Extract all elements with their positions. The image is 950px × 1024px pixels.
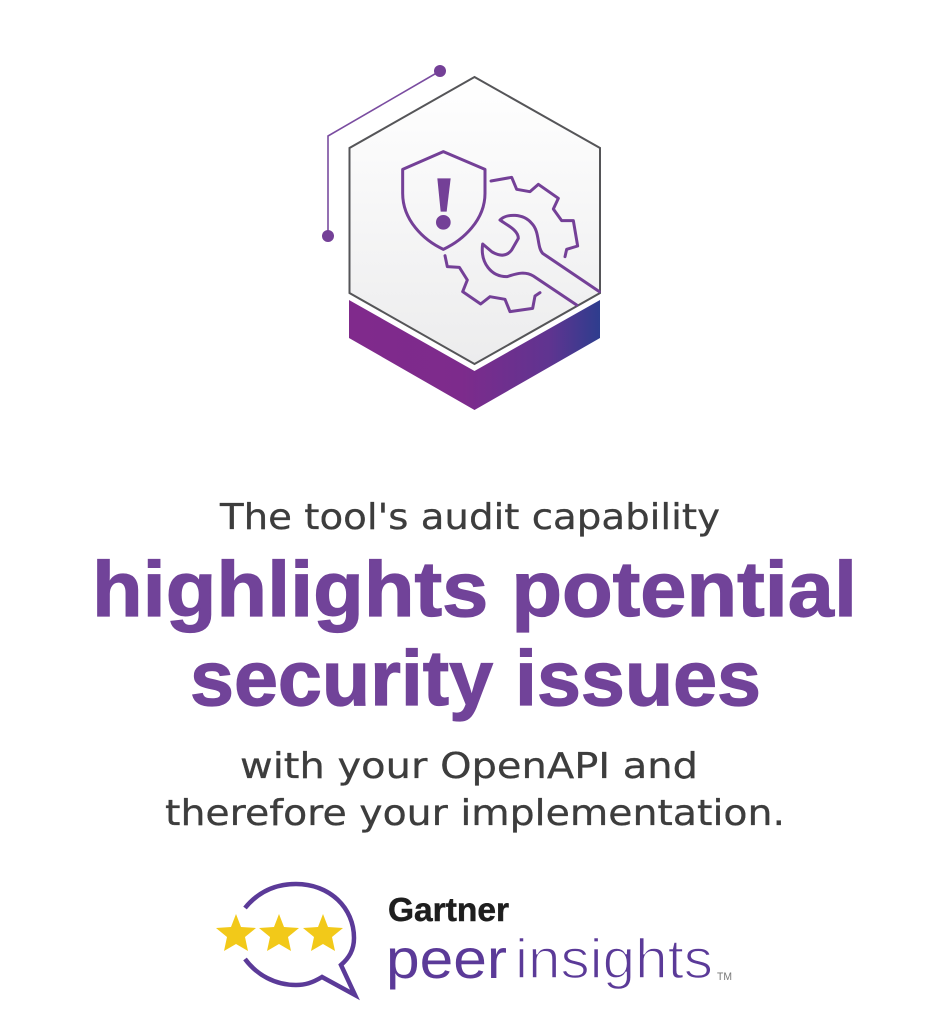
closing line 1: with your OpenAPI and [240,746,698,787]
closing text [165,746,785,834]
gradient base band [349,300,600,410]
headline line 2: security issues [190,634,761,722]
closing line 2: therefore your implementation. [165,793,785,834]
headline [92,545,857,722]
hexagon security illustration [322,65,600,410]
hexagon outline [350,77,600,364]
intro text: The tool's audit capability [219,497,720,538]
icon: shield and gear with wrench [403,152,599,312]
icon: shield [403,152,485,249]
icon: speech bubble [245,884,355,995]
Gartner wordmark: Gartner [388,891,509,928]
insights wordmark: insights [515,927,713,990]
Gartner Peer Insights logo [216,884,732,995]
icon: wrench [482,215,599,305]
icon: three stars [216,914,343,951]
trademark: TM [717,971,732,983]
headline line 1: highlights potential [92,545,857,633]
icon: gear [445,177,578,312]
connector line with dots [322,65,446,242]
peer wordmark: peer [386,927,507,990]
